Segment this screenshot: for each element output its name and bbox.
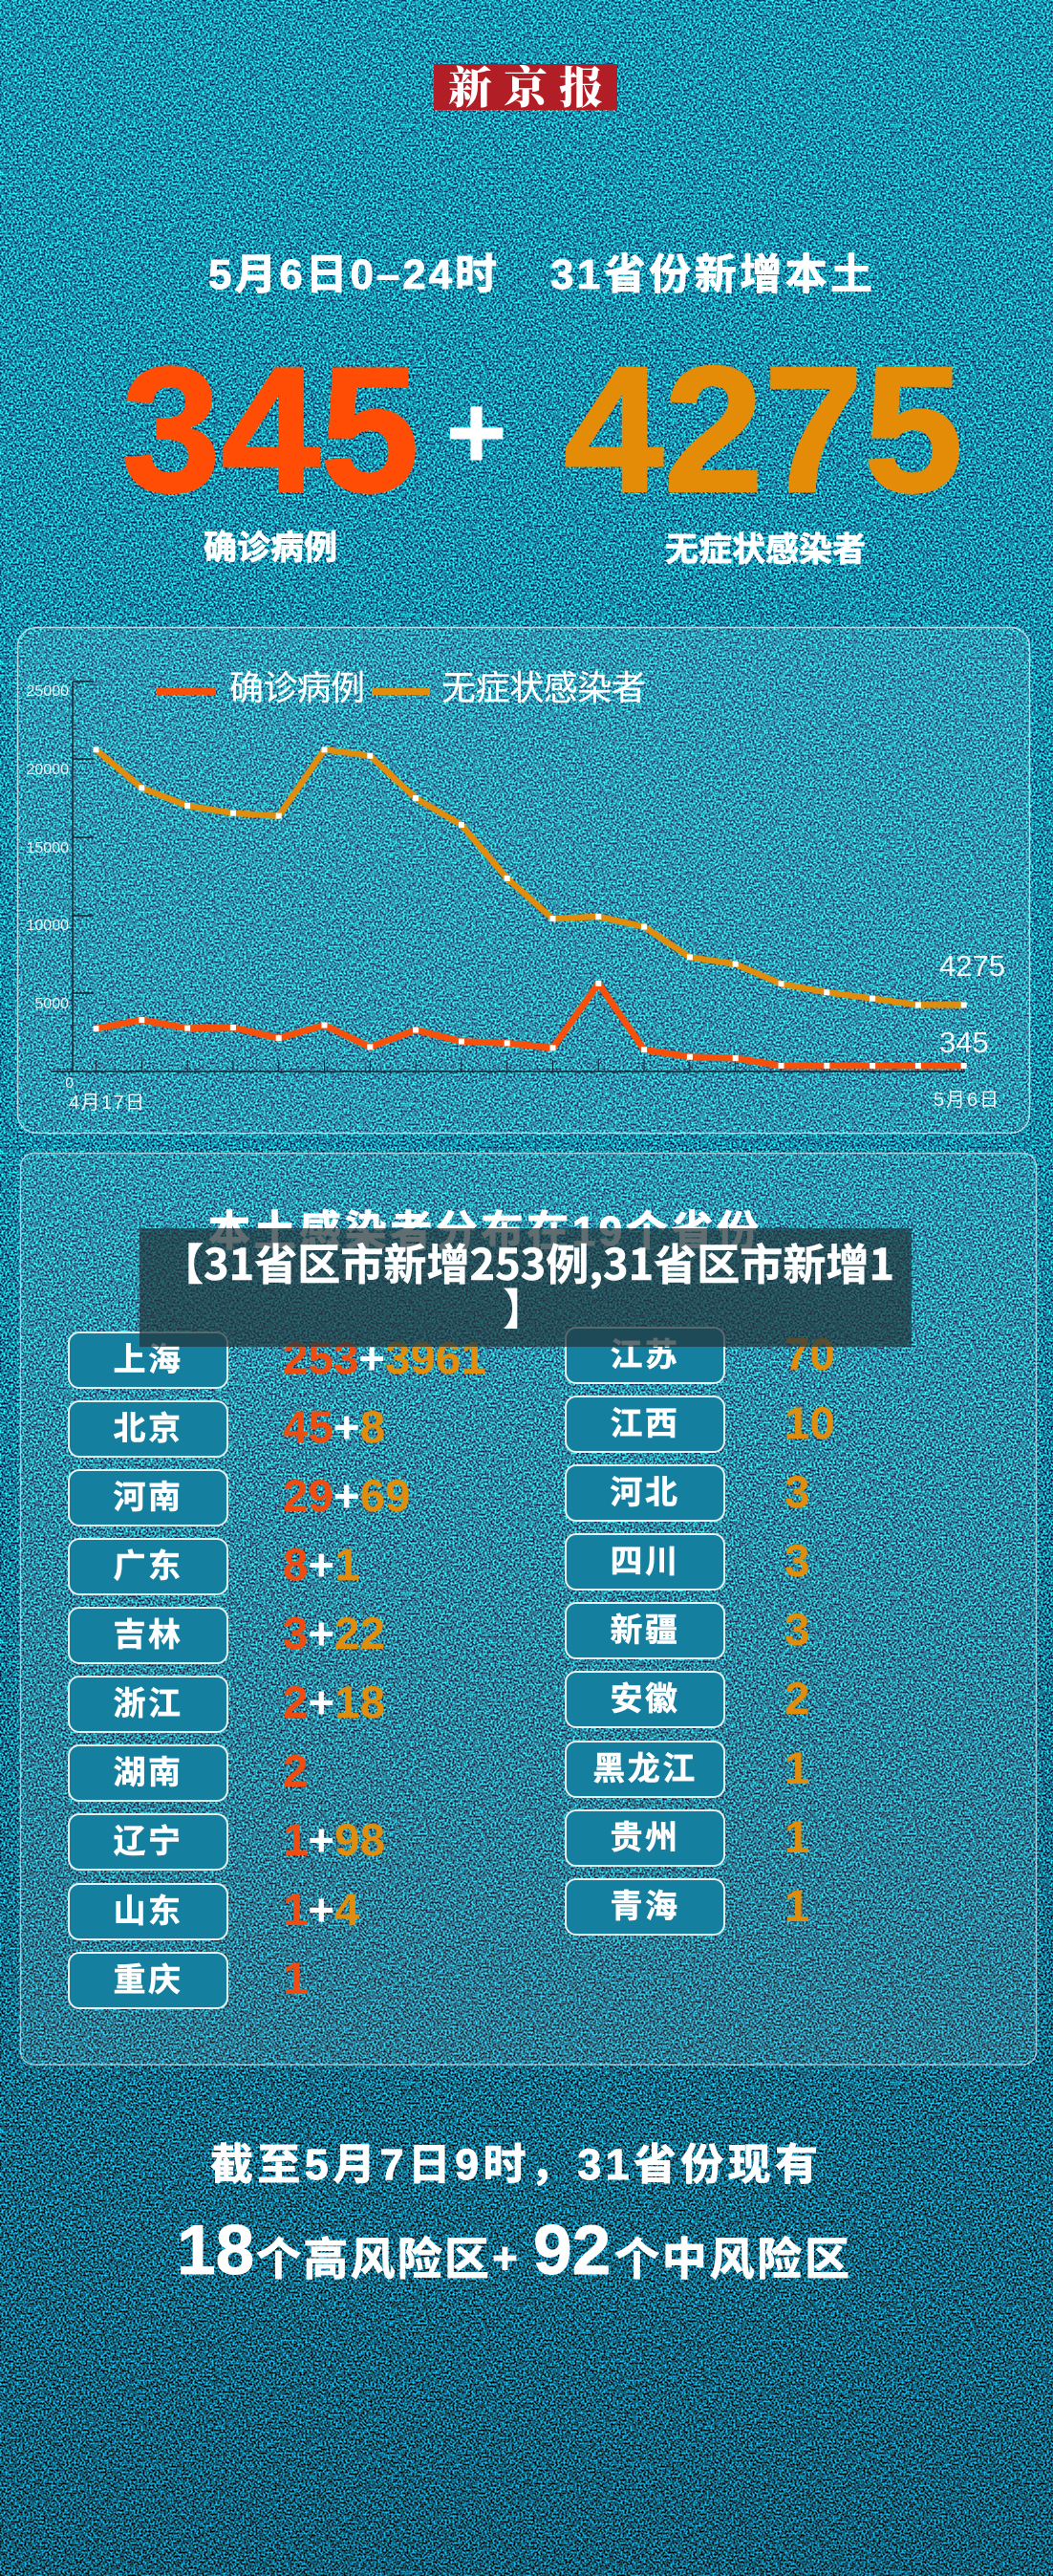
case counts, right column: 1 [784,1881,809,1932]
case counts, left column: 253+3961 [283,1333,486,1384]
case counts, right column: 70 [784,1330,835,1380]
y axis labels: 25000 [27,683,69,700]
province pills, left column: 辽宁 [113,1824,183,1860]
province pills, right column: 安徽 [610,1681,680,1718]
title: date and scope: 5月6日0–24时 [208,251,497,298]
legend: 确诊病例 [229,668,365,707]
end value labels [939,949,1005,1059]
province pills, left column: 广东 [113,1548,183,1585]
province pills, left column: 浙江 [113,1686,183,1722]
footer: as-of statement: 截至5月7日9时，31省份现有 [210,2140,818,2189]
province pills, right column [566,1328,724,1935]
y axis labels: 20000 [27,762,69,778]
province pills, left column: 重庆 [113,1962,183,1999]
headline number: confirmed cases: 确诊病例 [204,530,337,567]
case counts, right column: 2 [784,1674,809,1724]
case counts, right column: 3 [784,1536,809,1587]
footer: risk area counts: 18 [177,2212,254,2289]
panel heading: 本土感染者分布在19个省份 [208,1208,759,1255]
chart axes [51,682,965,1072]
province pills, right column: 黑龙江 [592,1751,698,1787]
line: confirmed [94,981,967,1069]
province pills, right column: 青海 [610,1889,680,1925]
footer: risk area counts: + [492,2233,518,2283]
y axis labels: 5000 [34,996,69,1012]
line: asymptomatic [94,747,967,1007]
footer: risk area counts [177,2212,849,2289]
case counts, right column: 1 [784,1812,809,1863]
case counts, right column: 3 [784,1605,809,1656]
province pills, right column: 四川 [610,1544,680,1580]
case counts, left column: 8+1 [283,1540,360,1591]
province pills, right column: 江苏 [610,1337,680,1374]
case counts, left column: 3+22 [283,1609,385,1659]
case counts, right column: 3 [784,1467,809,1518]
headline number: asymptomatic cases: 无症状感染者 [665,531,866,569]
x axis date labels: 5月6日 [934,1090,999,1111]
province pills, right column: 江西 [610,1406,680,1442]
case counts, left column: 45+8 [283,1402,385,1453]
y axis labels [27,683,74,1092]
case counts, right column: 1 [784,1743,809,1794]
end value labels: 4275 [939,949,1005,983]
case counts, left column [283,1333,486,2004]
province pills, left column: 山东 [113,1894,183,1930]
legend [157,668,646,707]
case counts, right column [784,1330,835,1932]
case counts, left column: 1 [283,1954,308,2004]
province pills, right column: 新疆 [610,1613,680,1649]
province pills, left column: 河南 [113,1480,183,1516]
title: date and scope [208,251,872,298]
x axis date labels: 4月17日 [69,1093,144,1114]
province pills, left column [69,1332,227,2008]
y axis labels: 10000 [27,918,69,934]
case counts, left column: 2+18 [283,1678,385,1728]
province pills, left column: 北京 [113,1411,183,1447]
headline number: confirmed cases: 345 [121,330,419,530]
case counts, right column: 10 [784,1398,835,1449]
case counts, left column: 2 [283,1746,308,1797]
title: date and scope: 31省份新增本土 [550,251,872,298]
province pills, left column: 吉林 [113,1617,183,1654]
case counts, left column: 1+98 [283,1815,385,1866]
y axis labels: 0 [65,1075,74,1092]
x axis date labels [69,1090,999,1114]
province pills, left column: 湖南 [113,1755,183,1791]
province pills, right column: 河北 [610,1475,680,1511]
case counts, left column: 29+69 [283,1471,410,1522]
panel: trend line chart [17,627,1030,1134]
footer: risk area counts: 个中风险区 [614,2234,849,2284]
plus sign: + [445,374,507,491]
province pills, right column: 贵州 [610,1820,680,1856]
overlay caption banner: 【31省区市新增253例,31省区市新增1 [161,1230,894,1292]
logo: 新京报: 新京报 [448,54,603,117]
headline number: asymptomatic cases: 4275 [564,329,963,530]
footer: risk area counts: 92 [533,2212,611,2289]
province pills, left column: 上海 [113,1342,183,1378]
overlay caption banner [140,1228,912,1347]
footer: risk area counts: 个高风险区 [256,2234,489,2284]
overlay caption banner: 】 [503,1275,546,1337]
case counts, left column: 1+4 [283,1885,360,1936]
end value labels: 345 [939,1026,989,1059]
legend: 无症状感染者 [441,668,646,707]
y axis labels: 15000 [27,840,69,856]
panel: province distribution [21,1153,1036,2065]
